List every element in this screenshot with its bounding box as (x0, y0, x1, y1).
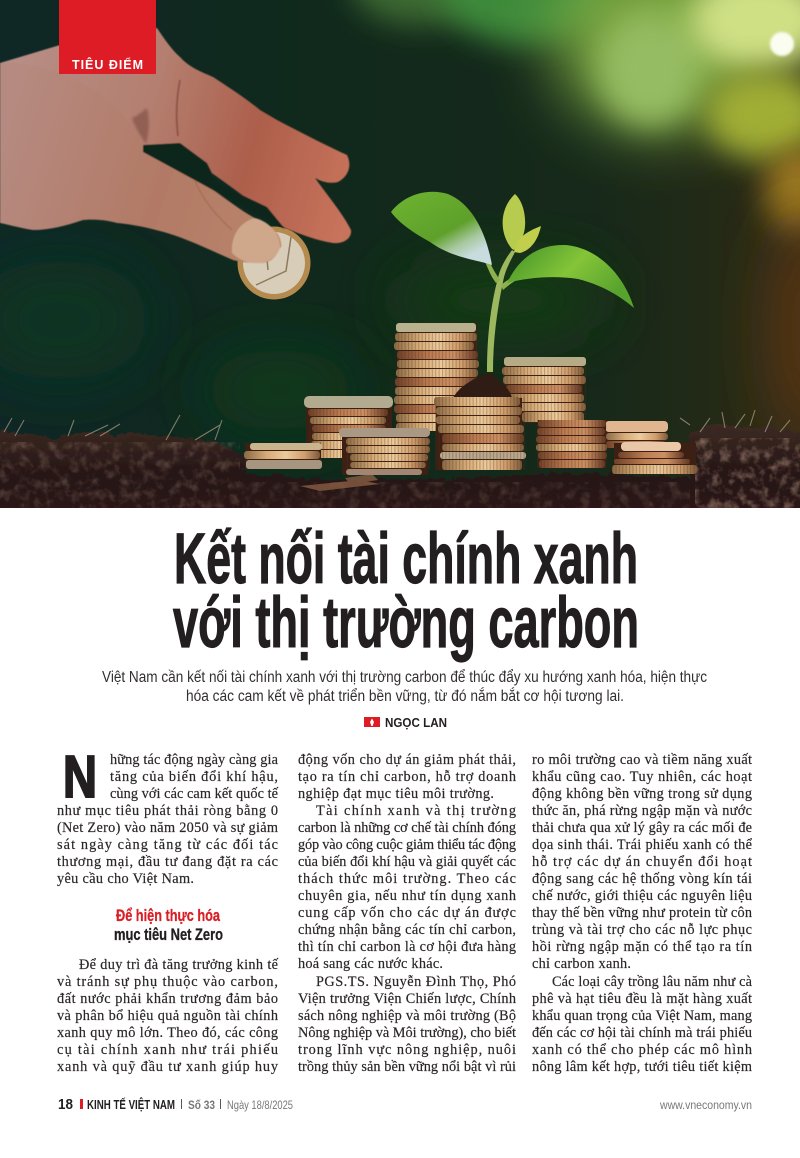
coin stack: right rear (502, 357, 586, 423)
footer: www.vneconomy.vn (659, 1098, 752, 1112)
small upper leaf (503, 194, 525, 250)
article column 2: thì tín chỉ carbon là cơ hội đưa hàng (298, 939, 516, 955)
article column 2: nghiệp đạt mục tiêu môi trường. (298, 786, 494, 802)
article column 2 (298, 752, 516, 1075)
article column 2: của biến đổi khí hậu và giải quyết các (298, 854, 516, 870)
article column 2: động vốn cho dự án giảm phát thải, (298, 752, 516, 768)
article column 3: Các loại cây trồng lâu năm như cà (552, 974, 753, 990)
soil ground (0, 410, 800, 515)
icon: pen nib (364, 717, 380, 727)
coin held by the fingers (238, 226, 310, 300)
hand (0, 28, 351, 263)
article column 3: chỉ carbon xanh. (532, 956, 631, 972)
article column 3: hồi rừng ngập mặn có thể tạo ra tín (532, 939, 752, 955)
article column 3: dọa sinh thái. Trái phiếu xanh có thể (532, 837, 753, 853)
article column 1 continued: đất nước phải khẩn trương đảm bảo (57, 991, 278, 1007)
article column 3: nông lâm kết hợp, tưới tiêu tiết kiệm (532, 1059, 752, 1075)
subheading: mục tiêu Net Zero (114, 925, 223, 944)
article column 3: thải chưa qua xử lý gây ra các mối đe (532, 820, 752, 836)
article column 1 intro: tăng của biến đổi khí hậu, (110, 769, 278, 785)
article column 3: động không bền vững trong sử dụng (532, 786, 752, 802)
hero photo: hand placing coin on growing coin stacks (0, 0, 800, 515)
article column 1 intro: hững tác động ngày càng gia (110, 752, 279, 768)
article column 1 intro: cùng với các cam kết quốc tế (110, 786, 279, 802)
article column 1 continued: và tránh sự phụ thuộc vào carbon, (57, 974, 278, 990)
subtitle: hóa các cam kết về phát triển bền vững, từ đó nắm bắt cơ hội tương lai. (186, 688, 624, 705)
article column 2: Tài chính xanh và thị trường (316, 803, 516, 819)
article column 1 continued (57, 957, 279, 1075)
article column 2: Viện trưởng Viện Chiến lược, Chính (298, 991, 516, 1007)
article column 1 continued: và phân bổ hiệu quả nguồn tài chính (57, 1008, 278, 1024)
subheading (114, 906, 223, 944)
article column 1 intro: (Net Zero) vào năm 2050 và sự giảm (57, 820, 278, 836)
article column 2: trồng thủy sản bền vững nổi bật vì rủi (298, 1059, 516, 1075)
footer: 18 (58, 1097, 73, 1113)
article column 3: khẩu cũng cao. Tuy nhiên, các hoạt (532, 769, 752, 785)
article column 1 intro: yêu cầu cho Việt Nam. (57, 871, 194, 887)
article column 2: sách nông nghiệp và môi trường (Bộ (298, 1008, 516, 1024)
coin stack: tall rear (394, 323, 479, 431)
left leaf (391, 192, 492, 265)
article column 3 (532, 752, 753, 1075)
article column 3: xanh có thể cho phép các mô hình (532, 1042, 752, 1058)
article column 1 intro (57, 752, 279, 887)
article column 1 continued: Để duy trì đà tăng trưởng kinh tế (79, 957, 279, 973)
article column 1 intro: sát ngày càng tăng từ các đối tác (57, 837, 278, 853)
article column 3: khẩu quan trọng của Việt Nam, mang (532, 1008, 752, 1024)
article column 2: chứng nhận bằng các tín chỉ carbon, (298, 922, 516, 938)
footer (58, 1097, 752, 1113)
article column 2: carbon là những cơ chế tài chính đóng (298, 820, 516, 836)
article column 1 continued: cụ tài chính xanh như trái phiếu (57, 1042, 278, 1058)
coin stack: left middle (304, 396, 393, 458)
footer: Số 33 (188, 1098, 215, 1112)
coin stack: low left (244, 443, 322, 469)
coin stack: right front (536, 420, 607, 468)
byline: NGỌC LAN (385, 715, 447, 730)
article column 1 intro: như mục tiêu phát thải ròng bằng 0 (57, 803, 278, 819)
article column 3: chế nước, giới thiệu các nguyên liệu (532, 888, 752, 904)
article column 3: thức ăn, phá rừng ngập mặn và nước (532, 803, 752, 819)
article column 2: PGS.TS. Nguyễn Đình Thọ, Phó (316, 974, 516, 990)
article column 3: động sang các hệ thống vòng kín tái (532, 871, 752, 887)
article column 2: chuyên gia, nếu như tín dụng xanh (298, 888, 516, 904)
article column 3: thay thế bền vững như protein từ côn (532, 905, 752, 921)
photo background bokeh (0, 0, 800, 508)
coin stack: far right upper (605, 421, 668, 448)
article column 1 intro: thương mại, đầu tư đang đặt ra các (57, 854, 278, 870)
article column 2: Nông nghiệp và Môi trường), cho biết (298, 1025, 516, 1041)
subheading: Để hiện thực hóa (116, 906, 220, 925)
article column 2: thách thức môi trường. Theo các (298, 871, 516, 887)
gap between thumb and index finger (143, 143, 285, 229)
article column 3: phê và hạt tiêu đều là mặt hàng xuất (532, 991, 752, 1007)
footer: Ngày 18/8/2025 (227, 1098, 293, 1112)
coin stack: far right front (612, 442, 697, 474)
article column 2: góp vào công cuộc giảm thiểu tác động (298, 837, 516, 853)
article column 2: cung cấp vốn cho các dự án được (298, 905, 516, 921)
article column 3: ro môi trường cao và tiềm năng xuất (532, 752, 752, 768)
article column 2: hoá sang các nước khác. (298, 956, 443, 972)
title (173, 520, 639, 663)
byline (364, 715, 447, 730)
coin stack: front centre with soil mound (434, 372, 526, 470)
section tag: TIÊU ĐIỂM (72, 57, 143, 72)
article column 3: trùng và tài trợ cho các nỗ lực phục (532, 922, 752, 938)
article column 3: hỗ trợ các dự án chuyển đổi hoạt (532, 854, 752, 870)
section tag (59, 0, 156, 74)
footer: KINH TẾ VIỆT NAM (87, 1097, 175, 1112)
plant: stem and leaves (391, 192, 634, 372)
article column 3: đến các cơ hội tài chính mà trái phiếu (532, 1025, 752, 1041)
article column 2: tạo ra tín chỉ carbon, hỗ trợ doanh (298, 769, 516, 785)
article column 1 continued: xanh quy mô lớn. Theo đó, các công (57, 1025, 278, 1041)
article column 1 continued: xanh và quỹ đầu tư xanh giúp huy (57, 1059, 279, 1075)
coin stack: front left (339, 428, 430, 475)
right leaf (507, 245, 634, 308)
subtitle: Việt Nam cần kết nối tài chính xanh với thị trường carbon để thúc đẩy xu hướng xanh hóa, hiện thực (102, 669, 707, 686)
subtitle (102, 669, 707, 705)
drop cap: N (63, 744, 97, 810)
article column 2: trong lĩnh vực nông nghiệp, nuôi (298, 1042, 516, 1058)
